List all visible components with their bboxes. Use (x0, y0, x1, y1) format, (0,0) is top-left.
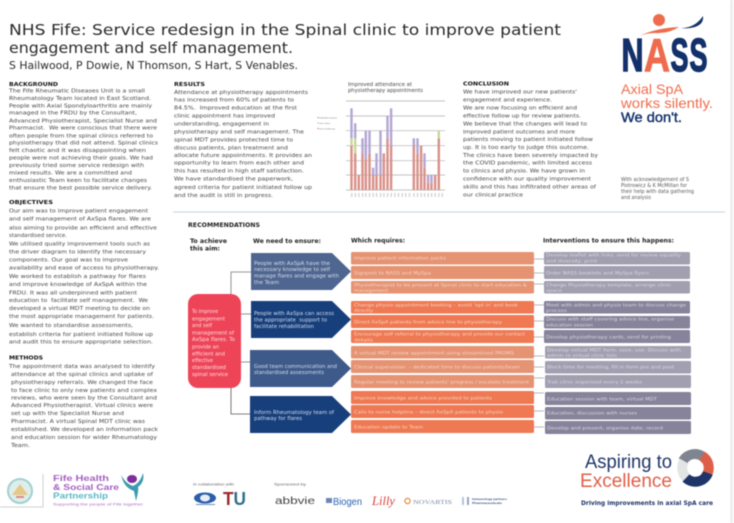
methods text: The appointment data was analysed to identify (8, 364, 156, 370)
aim box: AxSpa flares. To (192, 337, 235, 343)
logo: final sponsor: Immunology partners (472, 497, 507, 501)
driver arrow 4: pathway for flares (254, 416, 302, 422)
panel: results (174, 82, 313, 199)
results text: physiotherapy and self management. The (174, 130, 305, 136)
conclusion text: improved patient outcomes and more (463, 129, 576, 135)
chart title: physiotherapy appointments (348, 88, 423, 94)
background text: Rheumatology Team located in East Scotland. (9, 96, 151, 102)
logo: Novartis (405, 498, 453, 506)
heading: conclusion: CONCLUSION (463, 82, 509, 88)
logo: blue oval (194, 492, 216, 505)
logo: Fife Health and Social Care Partnership: Supporting the people of Fife together (53, 502, 144, 506)
chart title (348, 82, 423, 94)
aim box: To improve (191, 309, 218, 315)
logo: final sponsor: Pharmaceuticals (472, 501, 502, 505)
logo: NASS (622, 14, 708, 81)
conclusion text: We have improved our new patients' (463, 90, 577, 96)
objectives text: We worked to establish a pathway for flares (9, 274, 146, 280)
tagline: works silently. (620, 95, 713, 111)
interventions column: Develop and present, organise date, record (547, 426, 663, 432)
methods text: established. We developed an information pack (11, 427, 159, 433)
logo: Lilly: Lilly (371, 493, 395, 508)
interventions column: Discuss with staff covering advice line, organise (546, 317, 674, 323)
results text: agreed criteria for patient initiated follow up (174, 185, 313, 191)
logo: Fife Health and Social Care Partnership: Partnership (53, 490, 108, 500)
objectives text: establish criteria for patient initiated follow up (9, 332, 154, 338)
interventions column: education session (546, 323, 593, 329)
driver arrow 2: the appropriate support to (254, 317, 327, 323)
results text: Attendance at physiotherapy appointments (174, 90, 308, 96)
conclusion text: our clinical practice (463, 192, 524, 198)
sponsor logos (274, 482, 507, 508)
acknowledgement: their help with data gathering (621, 189, 694, 195)
aim box: management of (192, 330, 234, 336)
methods text (8, 364, 159, 449)
results text: understanding, engagement in (174, 122, 270, 128)
results text: 84.5%. Improved education at the first (174, 106, 298, 112)
results text: allocate future appointments. It provides an (174, 153, 313, 159)
driver arrow 1: necessary knowledge to self (254, 267, 330, 273)
acknowledgement: With acknowledgement of S (621, 177, 689, 183)
background text: Pharmacist. We were conscious that there were (9, 126, 158, 132)
requirements column: Change physio appointment booking – avoid 'opt in' and book (354, 303, 518, 309)
driver arrow 3: Good team communication and (254, 364, 337, 370)
background text: Advanced Physiotherapist, Specialist Nurse and (9, 118, 157, 124)
methods text: attendance at the spinal clinics and uptake of (11, 372, 154, 378)
logo: Aspiring to Excellence (580, 452, 714, 507)
logo: NASS: S (670, 29, 688, 81)
results text: We have standardised the paperwork, (174, 177, 293, 183)
driver arrow 1: the Team (254, 280, 279, 286)
requirements column: details (354, 338, 374, 344)
acknowledgement: Piotrowicz & K McMillan for (621, 183, 687, 189)
conclusion text: to clinics and physio. We have grown in (463, 168, 586, 174)
objectives text: components. Our goal was to improve (9, 257, 129, 263)
chart legend (318, 117, 337, 130)
conclusion text: We are now focusing on efficient and (463, 106, 577, 112)
objectives text: availability and ease of access to physiotherapy. (9, 266, 159, 272)
results text: discuss patients, plan treatment and (174, 146, 288, 152)
interventions column: Education session with team, virtual MDT (547, 397, 657, 403)
driver arrow 3 (250, 350, 351, 387)
logo: final sponsor (462, 497, 507, 505)
objectives text (9, 209, 159, 346)
objectives text: We utilised quality improvement tools such as (9, 241, 150, 247)
driver arrow 2: facilitate rehabilitation (254, 324, 314, 330)
driver arrow 2 (251, 301, 351, 338)
objectives text: the driver diagram to identify the necessary (9, 250, 147, 256)
driver arrow 3: standardised assessments (254, 370, 324, 376)
objectives text: standardised service. (9, 233, 67, 239)
heading: methods: METHODS (9, 356, 43, 362)
objectives text: education to facilitate self management. We (9, 298, 149, 304)
logo: Novartis: NOVARTIS (413, 499, 453, 506)
interventions column: Change Physiotherapy template, arrange clinic (546, 283, 672, 289)
driver arrow 4 (250, 396, 351, 433)
chart legend: Last class (319, 122, 330, 125)
aim box: and self (192, 323, 212, 329)
results text: and the audit is still in progress. (174, 193, 273, 199)
requirements column: Improve knowledge and advice provided to patients (354, 396, 493, 402)
conclusion text (462, 90, 599, 198)
driver arrow 1: manage flares and engage with (254, 274, 339, 280)
background text: People with Axial Spondyloarthritis are mainly (9, 104, 153, 110)
chart title: Improved attendance at (348, 82, 412, 88)
logo: Fife Health and Social Care Partnership: & Social Care (53, 482, 119, 492)
results text: spinal MDT provides protected time to (174, 138, 294, 144)
aim box: effective (192, 358, 213, 364)
objectives text: FRDU. It was all underpinned with patient (9, 290, 138, 296)
background text: managed in the FRDU by the Consultant, (9, 111, 137, 117)
sponsor logos: Sponsored by (274, 482, 306, 486)
logo: NHS Fife crest (0, 474, 43, 507)
logo: TU: TU (223, 489, 246, 509)
objectives text: Our aim was to improve patient engagement (9, 209, 149, 215)
authors: S Hailwood, P Dowie, N Thomson, S Hart, S Venables. (9, 59, 298, 72)
bar chart: improved attendance (346, 82, 445, 197)
requirements column: A virtual MDT review appointment using streamlined PROMS (354, 351, 514, 357)
heading: results: RESULTS (174, 82, 205, 88)
requirements column: Regular meeting to review patients' progress / escalate treatment (354, 380, 529, 386)
collaboration logos: In collaboration with (193, 482, 234, 486)
logo: NASS: S (690, 29, 708, 81)
panel: methods (8, 356, 159, 449)
acknowledgement (621, 177, 694, 201)
driver arrow 2: People with AxSpa can access (254, 311, 334, 317)
logo: NASS: N (622, 29, 644, 81)
background text: enthusiastic Team keen to facilitate changes (9, 178, 147, 184)
driver arrow 4: Inform Rheumatology team of (254, 410, 334, 416)
requirements column: Calls to nurse helpline – direct AxSpA patients to physio (354, 410, 503, 416)
logo: Fife Health and Social Care Partnership: Fife Health (53, 473, 109, 483)
conclusion text: We believe that the changes will lead to (463, 121, 588, 127)
logo: Aspiring to Excellence: Aspiring to (585, 452, 672, 473)
background text: often people from the spinal clinics referred to (9, 134, 154, 140)
objectives text: and improve knowledge of AxSpA within the (9, 282, 148, 288)
objectives text: and self management of AxSpa flares. We are (9, 216, 152, 222)
chart legend: Lost to follow up (319, 127, 336, 130)
column headings: We need to ensure: (253, 238, 321, 245)
logo: Biogen: Biogen (333, 497, 362, 508)
aim box: provide an (192, 344, 219, 350)
title: NHS Fife: Service redesign in the Spinal clinic to improve patient (9, 21, 561, 39)
column headings: To achieve (190, 238, 227, 245)
panel: objectives (9, 200, 159, 346)
heading: recommendations: RECOMMENDATIONS (188, 222, 260, 229)
background text: The Fife Rheumatic Diseases Unit is a small (8, 89, 146, 95)
logo: Fife Health and Social Care Partnership (53, 473, 144, 506)
logo: Aspiring to Excellence: Driving improvements in axial SpA care (581, 499, 714, 507)
methods text: reviews, who were seen by the Consultant and (11, 396, 157, 402)
requirements column: Direct AxSpA patients from advice line to physiotherapy (354, 320, 502, 326)
interventions column: Block time for meeting, fill in form pre and post (547, 365, 674, 371)
aim box: engagement (192, 316, 225, 322)
column headings: Interventions to ensure this happens: (543, 238, 674, 245)
chart legend: Individual sessions (319, 118, 337, 120)
methods text: Team. (10, 443, 30, 449)
interventions column: Order NASS booklets and MySpa flyers (546, 271, 650, 277)
results text: has increased from 60% of patients to (174, 98, 295, 104)
background text: people were not achieving their goals. We had (9, 156, 153, 162)
background text: felt chaotic and it was disappointing when (9, 148, 147, 154)
methods text: physiotherapy referrals. We changed the face (11, 380, 154, 386)
column headings: Which requires: (351, 238, 405, 245)
interventions column: Education, discussion with nurses (547, 411, 638, 417)
requirements column: Education update to Team (354, 425, 423, 431)
aim box: spinal service (192, 372, 228, 378)
conclusion text: up. It is too early to judge this outcome. (463, 145, 589, 151)
background text: that ensure the best possible service delivery. (9, 186, 152, 192)
driver arrow 1 (251, 253, 351, 290)
objectives text: We wanted to standardise assessments, (9, 323, 133, 329)
requirements column: Physiotherapist to be present at Spinal clinic to start education & (354, 283, 528, 289)
interventions column: Develop leaflet with links, send for review equality (546, 253, 681, 259)
heading: background: BACKGROUND (9, 82, 58, 88)
objectives text: developed a virtual MDT meeting to decide on (9, 306, 151, 312)
column headings (190, 238, 674, 253)
conclusion text: the COVID pandemic, with limited access (463, 160, 592, 166)
background text (8, 89, 158, 192)
requirements column (351, 252, 534, 433)
x axis labels (351, 193, 443, 197)
interventions column: Develop virtual MDT form, save, use. Discuss with (547, 348, 681, 354)
objectives text: the most appropriate management for patients. (9, 314, 154, 320)
interventions column (544, 252, 691, 434)
background text: mixed results. We are a committed and (9, 171, 132, 177)
background text: physiotherapy that did not attend. Spinal clinics (9, 141, 158, 147)
requirements column: Clinical supervision – dedicated time to discuss patients/team (354, 365, 520, 371)
aim box: standardised (192, 365, 226, 371)
aim box (188, 294, 241, 388)
interventions column: Meet with admin and physio team to discuss change (546, 303, 686, 309)
interventions column: and diversity, print (546, 259, 597, 265)
title (9, 21, 561, 57)
requirements column: management (354, 288, 388, 294)
methods text: set up with the Specialist Nurse and (11, 411, 124, 417)
methods text: Pharmacist. A virtual Spinal MDT clinic was (11, 419, 145, 425)
collaboration logos (193, 482, 246, 509)
conclusion text: skills and this has infiltrated other areas of (463, 185, 597, 191)
aim box: efficient and (192, 351, 225, 357)
tagline (620, 81, 713, 125)
objectives text: and audit this to ensure appropriate selection. (9, 340, 153, 346)
interventions column: process (546, 308, 568, 314)
driver arrow 1: People with AxSpA have the (254, 261, 330, 267)
title: engagement and self management. (9, 39, 293, 57)
logo: NASS: A (644, 29, 670, 81)
logo: abbvie: abbvie (275, 496, 316, 507)
methods text: to face clinic to only new patients and complex (11, 388, 158, 394)
conclusion text: engagement and experience. (463, 98, 552, 104)
panel: conclusion (462, 82, 599, 198)
results text: this has resulted in high staff satisfaction. (174, 169, 304, 175)
background text: previously tried some service redesign with (9, 163, 145, 169)
heading: objectives: OBJECTIVES (9, 200, 53, 206)
bars (350, 108, 440, 190)
methods text: Advanced Physiotherapist. Virtual clinics were (11, 403, 154, 409)
tagline: We don't. (621, 109, 682, 125)
requirements column: Encourage self referral to physiotherapy and provide our contact (354, 332, 525, 338)
acknowledgement: and analysis (621, 195, 651, 201)
tagline: Axial SpA (621, 81, 684, 97)
icon: ring (682, 454, 709, 482)
column headings: this aim: (190, 246, 220, 253)
requirements column: Improve patient information packs (354, 256, 447, 262)
conclusion text: patients moving to patient initiated follow (463, 137, 594, 143)
interventions column: admin re virtual clinic lists (547, 353, 618, 359)
conclusion text: The clinics have been severely impacted by (462, 153, 599, 159)
conclusion text: confidence with our quality improvement (463, 176, 592, 182)
results text (174, 90, 313, 199)
connectors from aim to drivers (231, 272, 251, 414)
interventions column: Trak clinic organised every 2 weeks (546, 380, 643, 386)
results text: opportunity to learn from each other and (174, 161, 304, 167)
conclusion text: effective follow up for review patients. (463, 113, 581, 119)
methods text: and education session for wider Rheumatology (11, 435, 158, 441)
objectives text: also aiming to provide an efficient and effective (9, 226, 158, 232)
requirements column: Signpost to NASS and MySpa (354, 271, 431, 277)
connectors between requirements and interventions (534, 259, 544, 427)
logo: Aspiring to Excellence: Excellence (580, 471, 672, 492)
interventions column: Develop physiotherapy cards, send for printing (546, 335, 671, 341)
interventions column: space (546, 289, 562, 294)
results text: clinic appointment has improved (174, 114, 275, 120)
requirements column: directly (354, 308, 373, 314)
panel: background (8, 82, 158, 192)
